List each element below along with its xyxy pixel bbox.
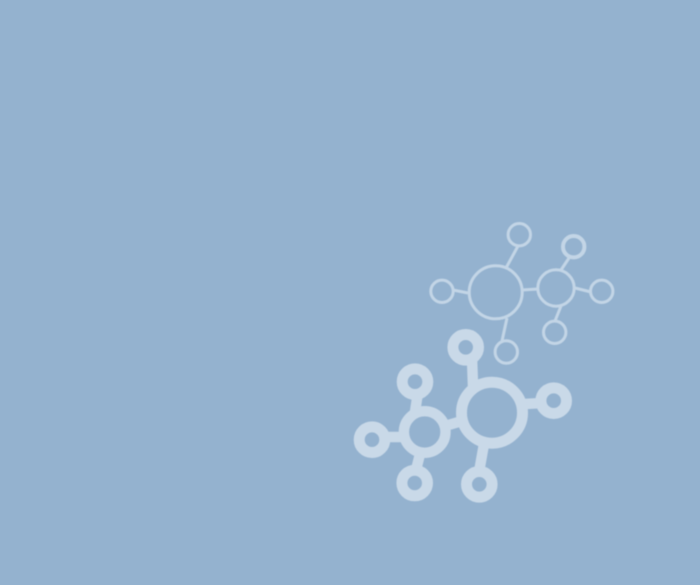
icon: bold network: [359, 334, 566, 497]
icon: thin outlined network: [431, 224, 613, 363]
